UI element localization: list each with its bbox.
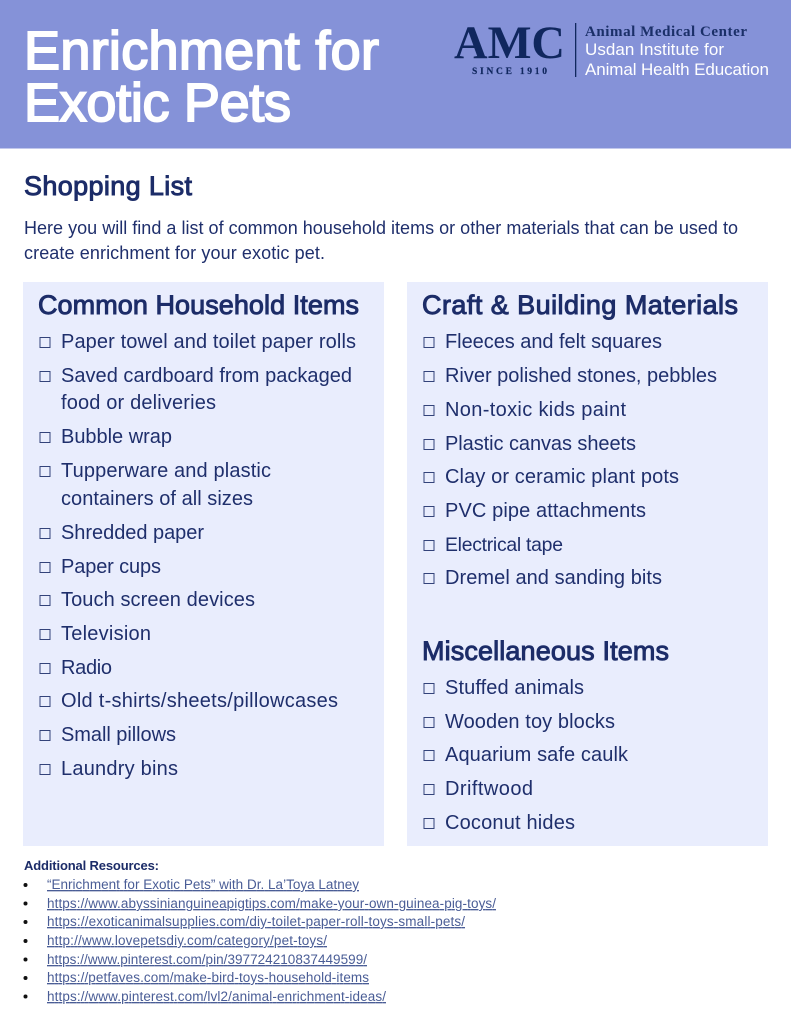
logo: AMC Usdan Institute: AMC (454, 17, 565, 69)
resource links list: https://petfaves.com/make-bird-toys-household-items (47, 970, 369, 985)
intro text (24, 218, 738, 263)
heading: Craft & Building Materials: Craft & Building Materials (422, 290, 738, 320)
logo: AMC Usdan Institute: Usdan Institute for (585, 40, 724, 59)
resource links list (24, 877, 496, 1004)
checklist: craft materials: Dremel and sanding bits (445, 567, 662, 589)
checklist: craft materials (424, 331, 717, 589)
checklist: craft materials: Plastic canvas sheets (445, 433, 636, 455)
resource links list: https://www.pinterest.com/lvl2/animal-enrichment-ideas/ (47, 989, 386, 1004)
checklist: craft materials: River polished stones, pebbles (445, 365, 717, 387)
checklist: household items: Paper towel and toilet paper rolls (61, 331, 356, 353)
checklist: household items: Shredded paper (61, 522, 204, 544)
checklist: household items: Laundry bins (61, 758, 178, 780)
resource links list: “Enrichment for Exotic Pets” with Dr. La’Toya Latney (47, 877, 359, 892)
heading: Miscellaneous Items: Miscellaneous Items (422, 636, 669, 666)
checklist: miscellaneous items: Wooden toy blocks (445, 711, 615, 733)
checklist: household items: Old t-shirts/sheets/pillowcases (61, 690, 338, 712)
checklist: household items: Touch screen devices (61, 589, 255, 611)
checklist: household items: Television (61, 623, 151, 645)
title: Exotic Pets (24, 73, 291, 133)
checklist: household items: Saved cardboard from packaged (61, 365, 352, 387)
checklist: household items: Bubble wrap (61, 426, 172, 448)
logo: AMC Usdan Institute: Animal Medical Center (585, 24, 747, 40)
checklist: household items: containers of all sizes (61, 488, 253, 510)
logo: AMC Usdan Institute: Animal Health Education (585, 60, 769, 79)
checklist: craft materials: Fleeces and felt squares (445, 331, 662, 353)
checklist: household items: Tupperware and plastic (61, 460, 271, 482)
title (24, 21, 379, 133)
checklist: miscellaneous items (424, 677, 629, 834)
panel: Craft and Miscellaneous (407, 282, 768, 846)
resource links list: https://exoticanimalsupplies.com/diy-toilet-paper-roll-toys-small-pets/ (47, 914, 465, 929)
additional resources (24, 858, 496, 1004)
logo: AMC Usdan Institute (454, 17, 769, 79)
checklist: miscellaneous items: Stuffed animals (445, 677, 584, 699)
checklist: household items: Paper cups (61, 556, 161, 578)
heading: Shopping List: Shopping List (24, 171, 192, 201)
panel: Common Household Items (23, 282, 384, 846)
checklist: craft materials: PVC pipe attachments (445, 500, 646, 522)
resource links list: https://www.abyssinianguineapigtips.com/make-your-own-guinea-pig-toys/ (47, 896, 496, 911)
resource links list: http://www.lovepetsdiy.com/category/pet-toys/ (47, 933, 327, 948)
title: Enrichment for (24, 21, 379, 81)
resource links list: https://www.pinterest.com/pin/397724210837449599/ (47, 952, 367, 967)
logo: AMC Usdan Institute: SINCE 1910 (472, 67, 547, 77)
checklist: household items: food or deliveries (61, 392, 216, 414)
checklist: miscellaneous items: Coconut hides (445, 812, 575, 834)
resources heading: Additional Resources: (24, 858, 159, 873)
intro text: Here you will find a list of common household items or other materials that can be used to (24, 218, 738, 238)
checklist: household items: Radio (61, 657, 112, 679)
intro text: create enrichment for your exotic pet. (24, 243, 325, 263)
checklist: miscellaneous items: Aquarium safe caulk (445, 744, 629, 766)
checklist: miscellaneous items: Driftwood (445, 778, 533, 800)
checklist: craft materials: Electrical tape (445, 534, 563, 556)
heading: Common Household Items: Common Household Items (38, 290, 359, 320)
checklist: craft materials: Clay or ceramic plant pots (445, 466, 679, 488)
header banner (0, 0, 791, 148)
checklist: household items: Small pillows (61, 724, 176, 746)
checklist: household items (40, 331, 356, 780)
checklist: craft materials: Non-toxic kids paint (445, 399, 626, 421)
